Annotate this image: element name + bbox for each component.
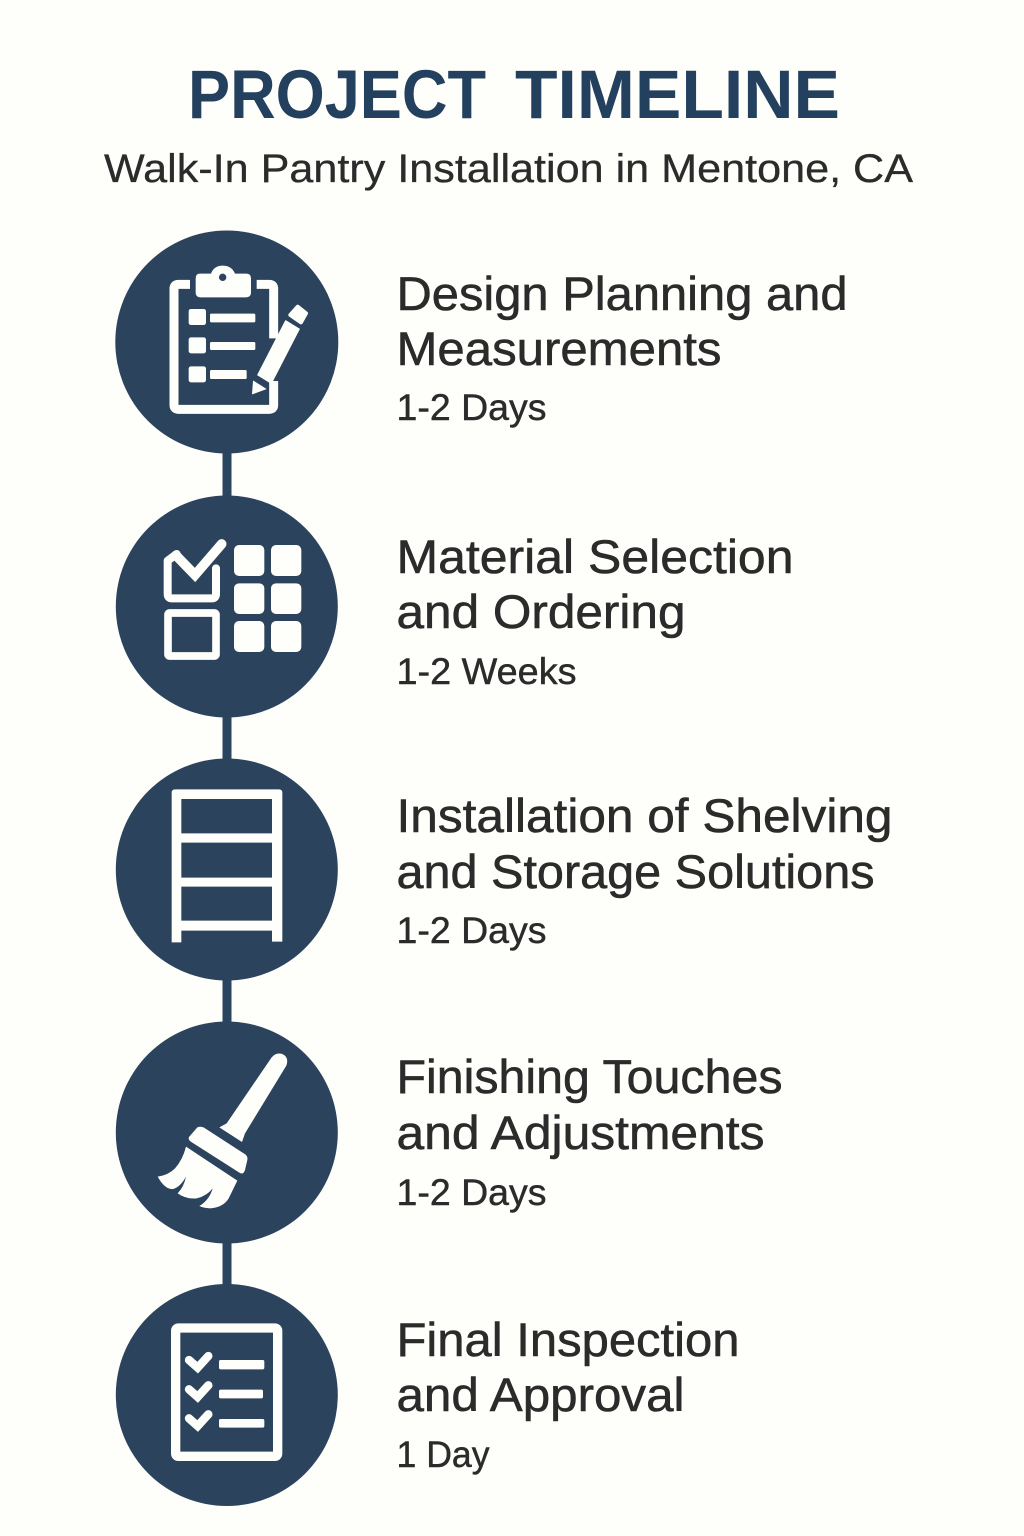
text: step 2: 1-2 Weeks bbox=[396, 651, 576, 692]
text: step 3: Installation of Shelving bbox=[396, 789, 892, 842]
text: step 2: and Ordering bbox=[396, 585, 686, 638]
circle 5 bbox=[116, 1284, 338, 1506]
icon: clipboard with pencil bbox=[174, 266, 306, 409]
text: step 3: 1-2 Days bbox=[396, 910, 546, 951]
text: step 5: and Approval bbox=[396, 1368, 684, 1421]
step 5: final inspection bbox=[116, 1284, 740, 1506]
text: step 5 bbox=[396, 1313, 740, 1475]
subtitle: Walk-In Pantry Installation in Mentone, CA bbox=[104, 147, 913, 191]
text: step 4: 1-2 Days bbox=[396, 1172, 546, 1213]
title: TIMELINE bbox=[515, 56, 840, 133]
step 2: material selection bbox=[116, 496, 794, 718]
text: step 4 bbox=[396, 1050, 782, 1213]
text: step 5: 1 Day bbox=[396, 1434, 490, 1475]
icon: shelving unit bbox=[172, 789, 282, 942]
circle 3 bbox=[116, 758, 338, 980]
icon: checkboxes and swatches bbox=[168, 544, 301, 656]
title: PROJECT bbox=[188, 56, 486, 133]
step 1: design planning bbox=[115, 230, 848, 454]
circle 1 bbox=[115, 230, 338, 454]
text: step 4: and Adjustments bbox=[396, 1106, 764, 1159]
icon: checklist bbox=[176, 1328, 278, 1456]
text: step 1: 1-2 Days bbox=[396, 387, 546, 428]
text: step 1: Design Planning and bbox=[396, 267, 848, 320]
text: step 5: Final Inspection bbox=[396, 1313, 740, 1366]
text: step 1 bbox=[396, 267, 848, 428]
timeline connector line bbox=[222, 440, 232, 1300]
step 4: finishing touches bbox=[116, 1022, 783, 1244]
title bbox=[188, 56, 840, 133]
text: step 2 bbox=[396, 530, 794, 692]
circle 4 bbox=[116, 1022, 338, 1244]
text: step 1: Measurements bbox=[396, 322, 722, 375]
text: step 3: and Storage Solutions bbox=[396, 845, 874, 898]
icon: paint brush bbox=[158, 1053, 287, 1208]
circle 2 bbox=[116, 496, 338, 718]
step 3: installation of shelving bbox=[116, 758, 893, 980]
text: step 2: Material Selection bbox=[396, 530, 794, 583]
text: step 4: Finishing Touches bbox=[396, 1050, 782, 1103]
text: step 3 bbox=[396, 789, 892, 951]
